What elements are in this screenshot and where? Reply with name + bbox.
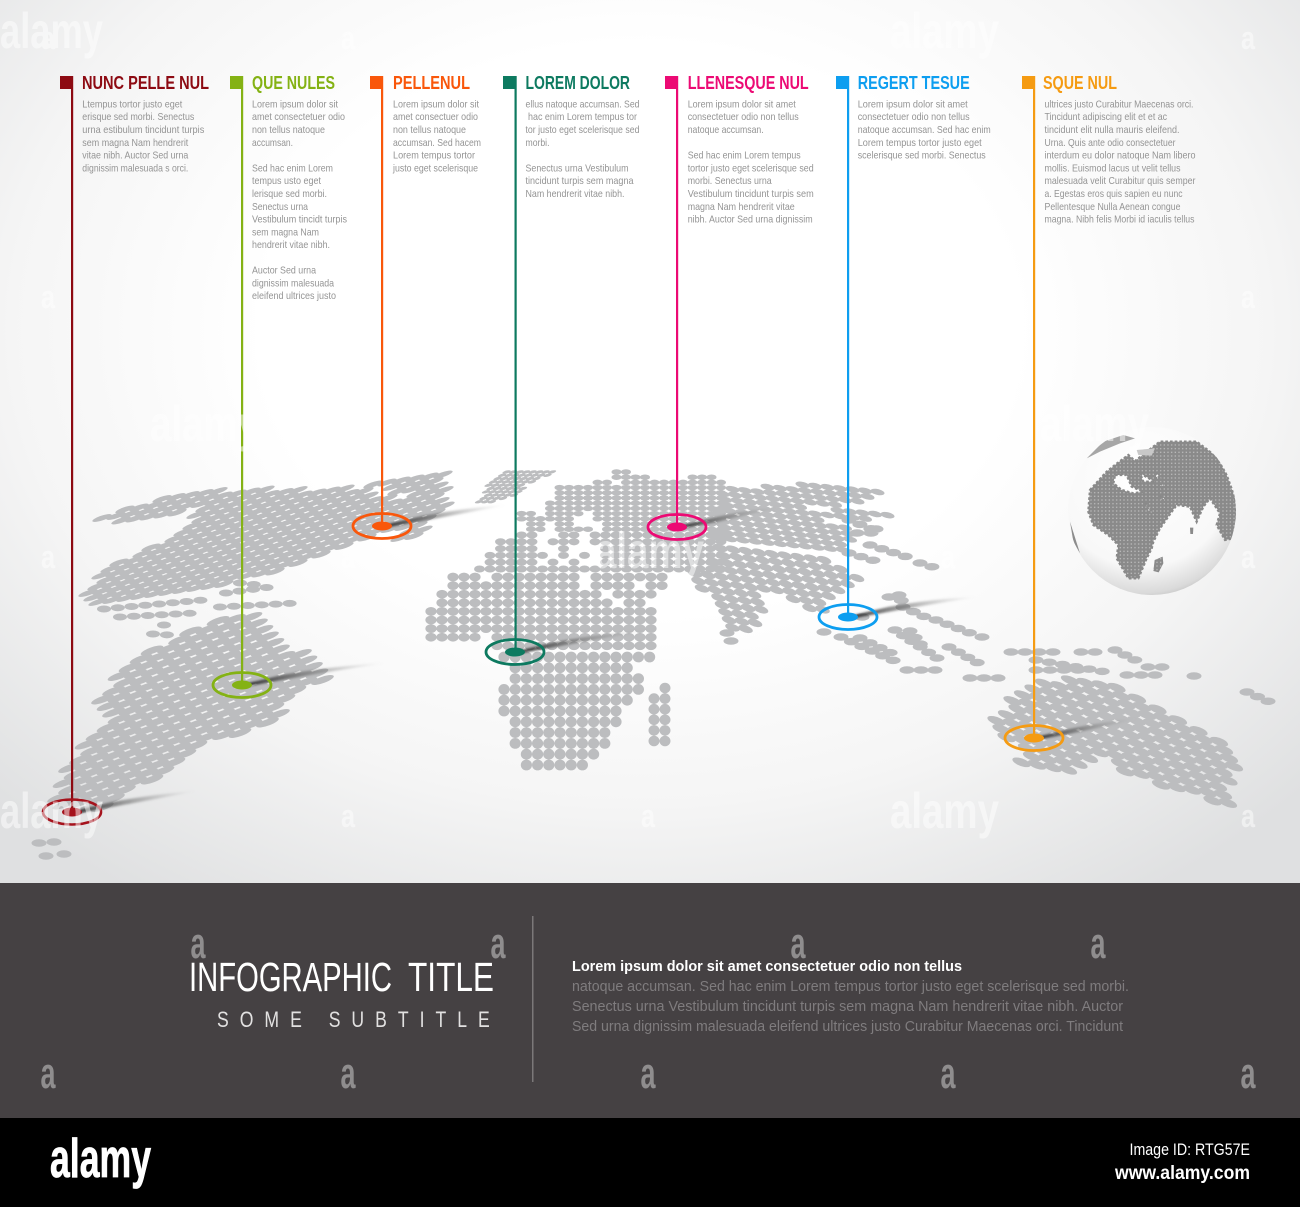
column: Nunc Pelle Nul: NUNC PELLE NUL bbox=[82, 73, 209, 93]
column: Que Nules: Auctor Sed urna bbox=[252, 265, 316, 277]
pin: teal, Africa bbox=[486, 76, 650, 664]
watermarks over the map: a bbox=[41, 539, 55, 575]
subtitle: SOME SUBTITLE bbox=[217, 1008, 490, 1033]
column: Llenesque Nul: Vestibulum tincidunt turpis sem bbox=[688, 188, 814, 200]
column: Nunc Pelle Nul bbox=[82, 73, 209, 174]
map: South America bbox=[0, 595, 433, 829]
column: Pellenul: amet consectuer odio bbox=[393, 111, 478, 123]
map: southern Europe and Middle East bbox=[480, 535, 722, 569]
column: Que Nules: eleifend ultrices justo bbox=[252, 290, 336, 302]
column: Pellenul: Lorem ipsum dolor sit bbox=[393, 98, 479, 110]
pin: orange, North America bbox=[353, 76, 507, 538]
watermarks over the map: alamy bbox=[150, 396, 259, 452]
watermark letters on the band: a bbox=[190, 919, 206, 968]
icon: globe bbox=[1068, 427, 1237, 595]
column: Nunc Pelle Nul: sem magna Nam hendrerit bbox=[82, 137, 188, 149]
watermarks over the map: a bbox=[1241, 20, 1255, 56]
watermarks over the map: a bbox=[41, 20, 55, 56]
column: Sque Nul bbox=[1043, 73, 1196, 226]
watermark letters on the band: a bbox=[340, 1049, 356, 1098]
website: www.alamy.com bbox=[1114, 1163, 1250, 1184]
column: Que Nules: tempus usto eget bbox=[252, 175, 321, 187]
column: Que Nules: QUE NULES bbox=[252, 73, 335, 93]
map: Asian and Pacific islands bbox=[727, 520, 1272, 703]
watermark letters on the band: a bbox=[40, 1049, 56, 1098]
column: Llenesque Nul: LLENESQUE NUL bbox=[688, 73, 809, 93]
image id: Image ID: RTG57E bbox=[1130, 1140, 1250, 1159]
column: Sque Nul: magna. Nibh felis Morbi id iaculis tellus bbox=[1044, 214, 1194, 226]
watermarks over the map: a bbox=[341, 20, 355, 56]
panel: black footer bbox=[0, 1118, 1300, 1207]
column: Regert Tesue: scelerisque sed morbi. Senectus bbox=[858, 150, 986, 162]
map: Cape Horn islands bbox=[39, 842, 64, 856]
column: Sque Nul: malesuada velit Curabitur quis semper bbox=[1044, 175, 1196, 187]
pin: pink, Asia bbox=[648, 76, 782, 540]
column: Que Nules: non tellus natoque bbox=[252, 124, 325, 136]
watermarks over the map: a bbox=[941, 279, 955, 315]
column: Nunc Pelle Nul: vitae nibh. Auctor Sed urna bbox=[82, 150, 188, 162]
text block: description: Lorem ipsum dolor sit amet consectetuer odio non tellus bbox=[572, 958, 962, 975]
column: Pellenul: accumsan. Sed hacem bbox=[393, 137, 481, 149]
column: Nunc Pelle Nul: Ltempus tortor justo eget bbox=[82, 98, 182, 110]
column: Sque Nul: SQUE NUL bbox=[1043, 73, 1117, 93]
watermarks over the map: alamy bbox=[1040, 396, 1149, 452]
column: Llenesque Nul: natoque accumsan. bbox=[688, 124, 764, 136]
watermarks over the map: a bbox=[641, 20, 655, 56]
title: INFOGRAPHIC bbox=[189, 954, 392, 1000]
column: Que Nules: Vestibulum tincidt turpis bbox=[252, 214, 347, 226]
column: Lorem Dolor bbox=[526, 73, 640, 200]
column: Regert Tesue: REGERT TESUE bbox=[858, 73, 970, 93]
background bbox=[0, 0, 1300, 883]
column: Nunc Pelle Nul: erisque sed morbi. Senectus bbox=[82, 111, 194, 123]
column: Lorem Dolor: LOREM DOLOR bbox=[526, 73, 630, 93]
column: Llenesque Nul: Lorem ipsum dolor sit amet bbox=[688, 98, 796, 110]
pin: blue, Southeast Asia bbox=[819, 76, 978, 630]
column: Regert Tesue: Lorem ipsum dolor sit amet bbox=[858, 98, 968, 110]
column: Regert Tesue: consectetuer odio non tellus bbox=[858, 111, 970, 123]
column: Lorem Dolor: morbi. bbox=[526, 137, 550, 149]
watermarks over the map bbox=[0, 3, 1255, 839]
column: Regert Tesue: natoque accumsan. Sed hac enim bbox=[858, 124, 991, 136]
column: Lorem Dolor: tor justo eget scelerisque sed bbox=[526, 124, 640, 136]
logo: alamy: alamy bbox=[50, 1127, 151, 1189]
column: Llenesque Nul: Sed hac enim Lorem tempus bbox=[688, 150, 801, 162]
column: Que Nules bbox=[252, 73, 347, 302]
pin: amber, Australia bbox=[1005, 76, 1139, 750]
map: Siberia and China bbox=[690, 474, 906, 556]
watermarks over the map: a bbox=[641, 279, 655, 315]
watermark letters on the band: a bbox=[640, 1049, 656, 1098]
map: northern Africa and Arabia bbox=[431, 577, 663, 646]
watermarks over the map: a bbox=[41, 279, 55, 315]
column: Sque Nul: Urna. Quis ante odio consectetuer bbox=[1044, 137, 1176, 149]
column: Llenesque Nul: magna Nam hendrerit vitae bbox=[688, 201, 795, 213]
watermark letters on the band: a bbox=[1240, 1049, 1256, 1098]
watermarks over the map: alamy bbox=[0, 3, 103, 59]
watermark letters on the band: a bbox=[1090, 919, 1106, 968]
column: Que Nules: Lorem ipsum dolor sit bbox=[252, 98, 338, 110]
column: Sque Nul: Tincidunt adipiscing elit et et ac bbox=[1044, 111, 1167, 123]
map: southern Africa bbox=[504, 657, 650, 765]
divider bbox=[532, 916, 534, 1082]
text block: description: Senectus urna Vestibulum tincidunt turpis sem magna Nam hendrerit vitae nibh. Auctor bbox=[572, 998, 1123, 1015]
column: Sque Nul: mollis. Euismod lacus ut velit tellus bbox=[1044, 162, 1180, 174]
text block: description: Sed urna dignissim malesuada eleifend ultrices justo Curabitur Maecenas orci. Tincidunt bbox=[572, 1018, 1124, 1035]
watermarks over the map: alamy bbox=[890, 3, 999, 59]
column: Regert Tesue: Lorem tempus tortor justo eget bbox=[858, 137, 982, 149]
map: Australia bbox=[962, 663, 1260, 808]
watermarks over the map: alamy bbox=[595, 523, 704, 579]
column: Pellenul: PELLENUL bbox=[393, 73, 470, 93]
column: Nunc Pelle Nul: urna estibulum tincidunt turpis bbox=[82, 124, 204, 136]
title: TITLE bbox=[408, 954, 494, 1000]
column: Regert Tesue bbox=[858, 73, 991, 162]
column: Llenesque Nul: morbi. Senectus urna bbox=[688, 175, 772, 187]
watermarks over the map: a bbox=[341, 798, 355, 834]
column: Sque Nul: interdum eu dolor natoque Nam libero bbox=[1044, 150, 1196, 162]
column: Sque Nul: a. Egestas eros quis sapien eu nunc bbox=[1044, 188, 1182, 200]
column: Sque Nul: ultrices justo Curabitur Maecenas orci. bbox=[1044, 98, 1194, 110]
column: Pellenul: Lorem tempus tortor bbox=[393, 150, 475, 162]
column: Que Nules: Senectus urna bbox=[252, 201, 308, 213]
watermarks over the map: alamy bbox=[890, 783, 999, 839]
column: Lorem Dolor: Senectus urna Vestibulum bbox=[526, 162, 629, 174]
column: Que Nules: hendrerit vitae nibh. bbox=[252, 239, 330, 251]
panel: dark title band bbox=[0, 883, 1300, 1118]
column: Lorem Dolor: tincidunt turpis sem magna bbox=[526, 175, 634, 187]
text block: description bbox=[572, 958, 1129, 1035]
column: Pellenul: justo eget scelerisque bbox=[392, 162, 478, 174]
map: North America bbox=[0, 445, 541, 622]
watermark letters on the band: a bbox=[940, 1049, 956, 1098]
map: Greenland bbox=[466, 472, 552, 502]
watermark letters on the band: a bbox=[790, 919, 806, 968]
column: Lorem Dolor: hac enim Lorem tempus tor bbox=[528, 111, 637, 123]
column: Sque Nul: Pellentesque Nulla Aenean congue bbox=[1044, 201, 1181, 213]
text block: description: natoque accumsan. Sed hac enim Lorem tempus tortor justo eget scelerisque sed morbi. bbox=[572, 978, 1129, 995]
column: Que Nules: accumsan. bbox=[252, 137, 293, 149]
column: Que Nules: amet consectetuer odio bbox=[252, 111, 345, 123]
watermarks over the map: alamy bbox=[0, 783, 103, 839]
map: Mexico and Caribbean bbox=[104, 583, 297, 635]
column: Pellenul bbox=[392, 73, 481, 174]
map: northern Europe and Russia bbox=[522, 472, 721, 529]
column: Que Nules: sem magna Nam bbox=[252, 226, 319, 238]
column: Sque Nul: tincidunt elit nulla mauris eleifend. bbox=[1044, 124, 1180, 136]
column: Llenesque Nul: consectetuer odio non tellus bbox=[688, 111, 799, 123]
column: Lorem Dolor: ellus natoque accumsan. Sed bbox=[526, 98, 640, 110]
column: Llenesque Nul: nibh. Auctor Sed urna dignissim bbox=[688, 214, 813, 226]
watermarks over the map: a bbox=[641, 798, 655, 834]
watermark letters on the band bbox=[40, 919, 1256, 1098]
watermarks over the map: a bbox=[341, 539, 355, 575]
column: Lorem Dolor: Nam hendrerit vitae nibh. bbox=[526, 188, 624, 200]
pin: green, South America bbox=[213, 76, 387, 698]
watermarks over the map: a bbox=[1241, 798, 1255, 834]
map: India and Southeast Asia bbox=[681, 544, 889, 646]
column: Nunc Pelle Nul: dignissim malesuada s orci. bbox=[82, 162, 188, 174]
map: Madagascar bbox=[654, 688, 666, 741]
watermarks over the map: a bbox=[341, 279, 355, 315]
dotted world map bbox=[0, 445, 1272, 856]
watermarks over the map: a bbox=[1241, 539, 1255, 575]
column: Que Nules: dignissim malesuada bbox=[252, 277, 334, 289]
column: Pellenul: non tellus natoque bbox=[393, 124, 466, 136]
column: Llenesque Nul: tortor justo eget scelerisque sed bbox=[688, 162, 814, 174]
column: Que Nules: Sed hac enim Lorem bbox=[252, 162, 333, 174]
watermark letters on the band: a bbox=[490, 919, 506, 968]
pin: red, South America tip bbox=[43, 76, 197, 824]
column: Llenesque Nul bbox=[688, 73, 814, 226]
watermarks over the map: a bbox=[941, 539, 955, 575]
column: Que Nules: lerisque sed morbi. bbox=[252, 188, 327, 200]
watermarks over the map: a bbox=[1241, 279, 1255, 315]
